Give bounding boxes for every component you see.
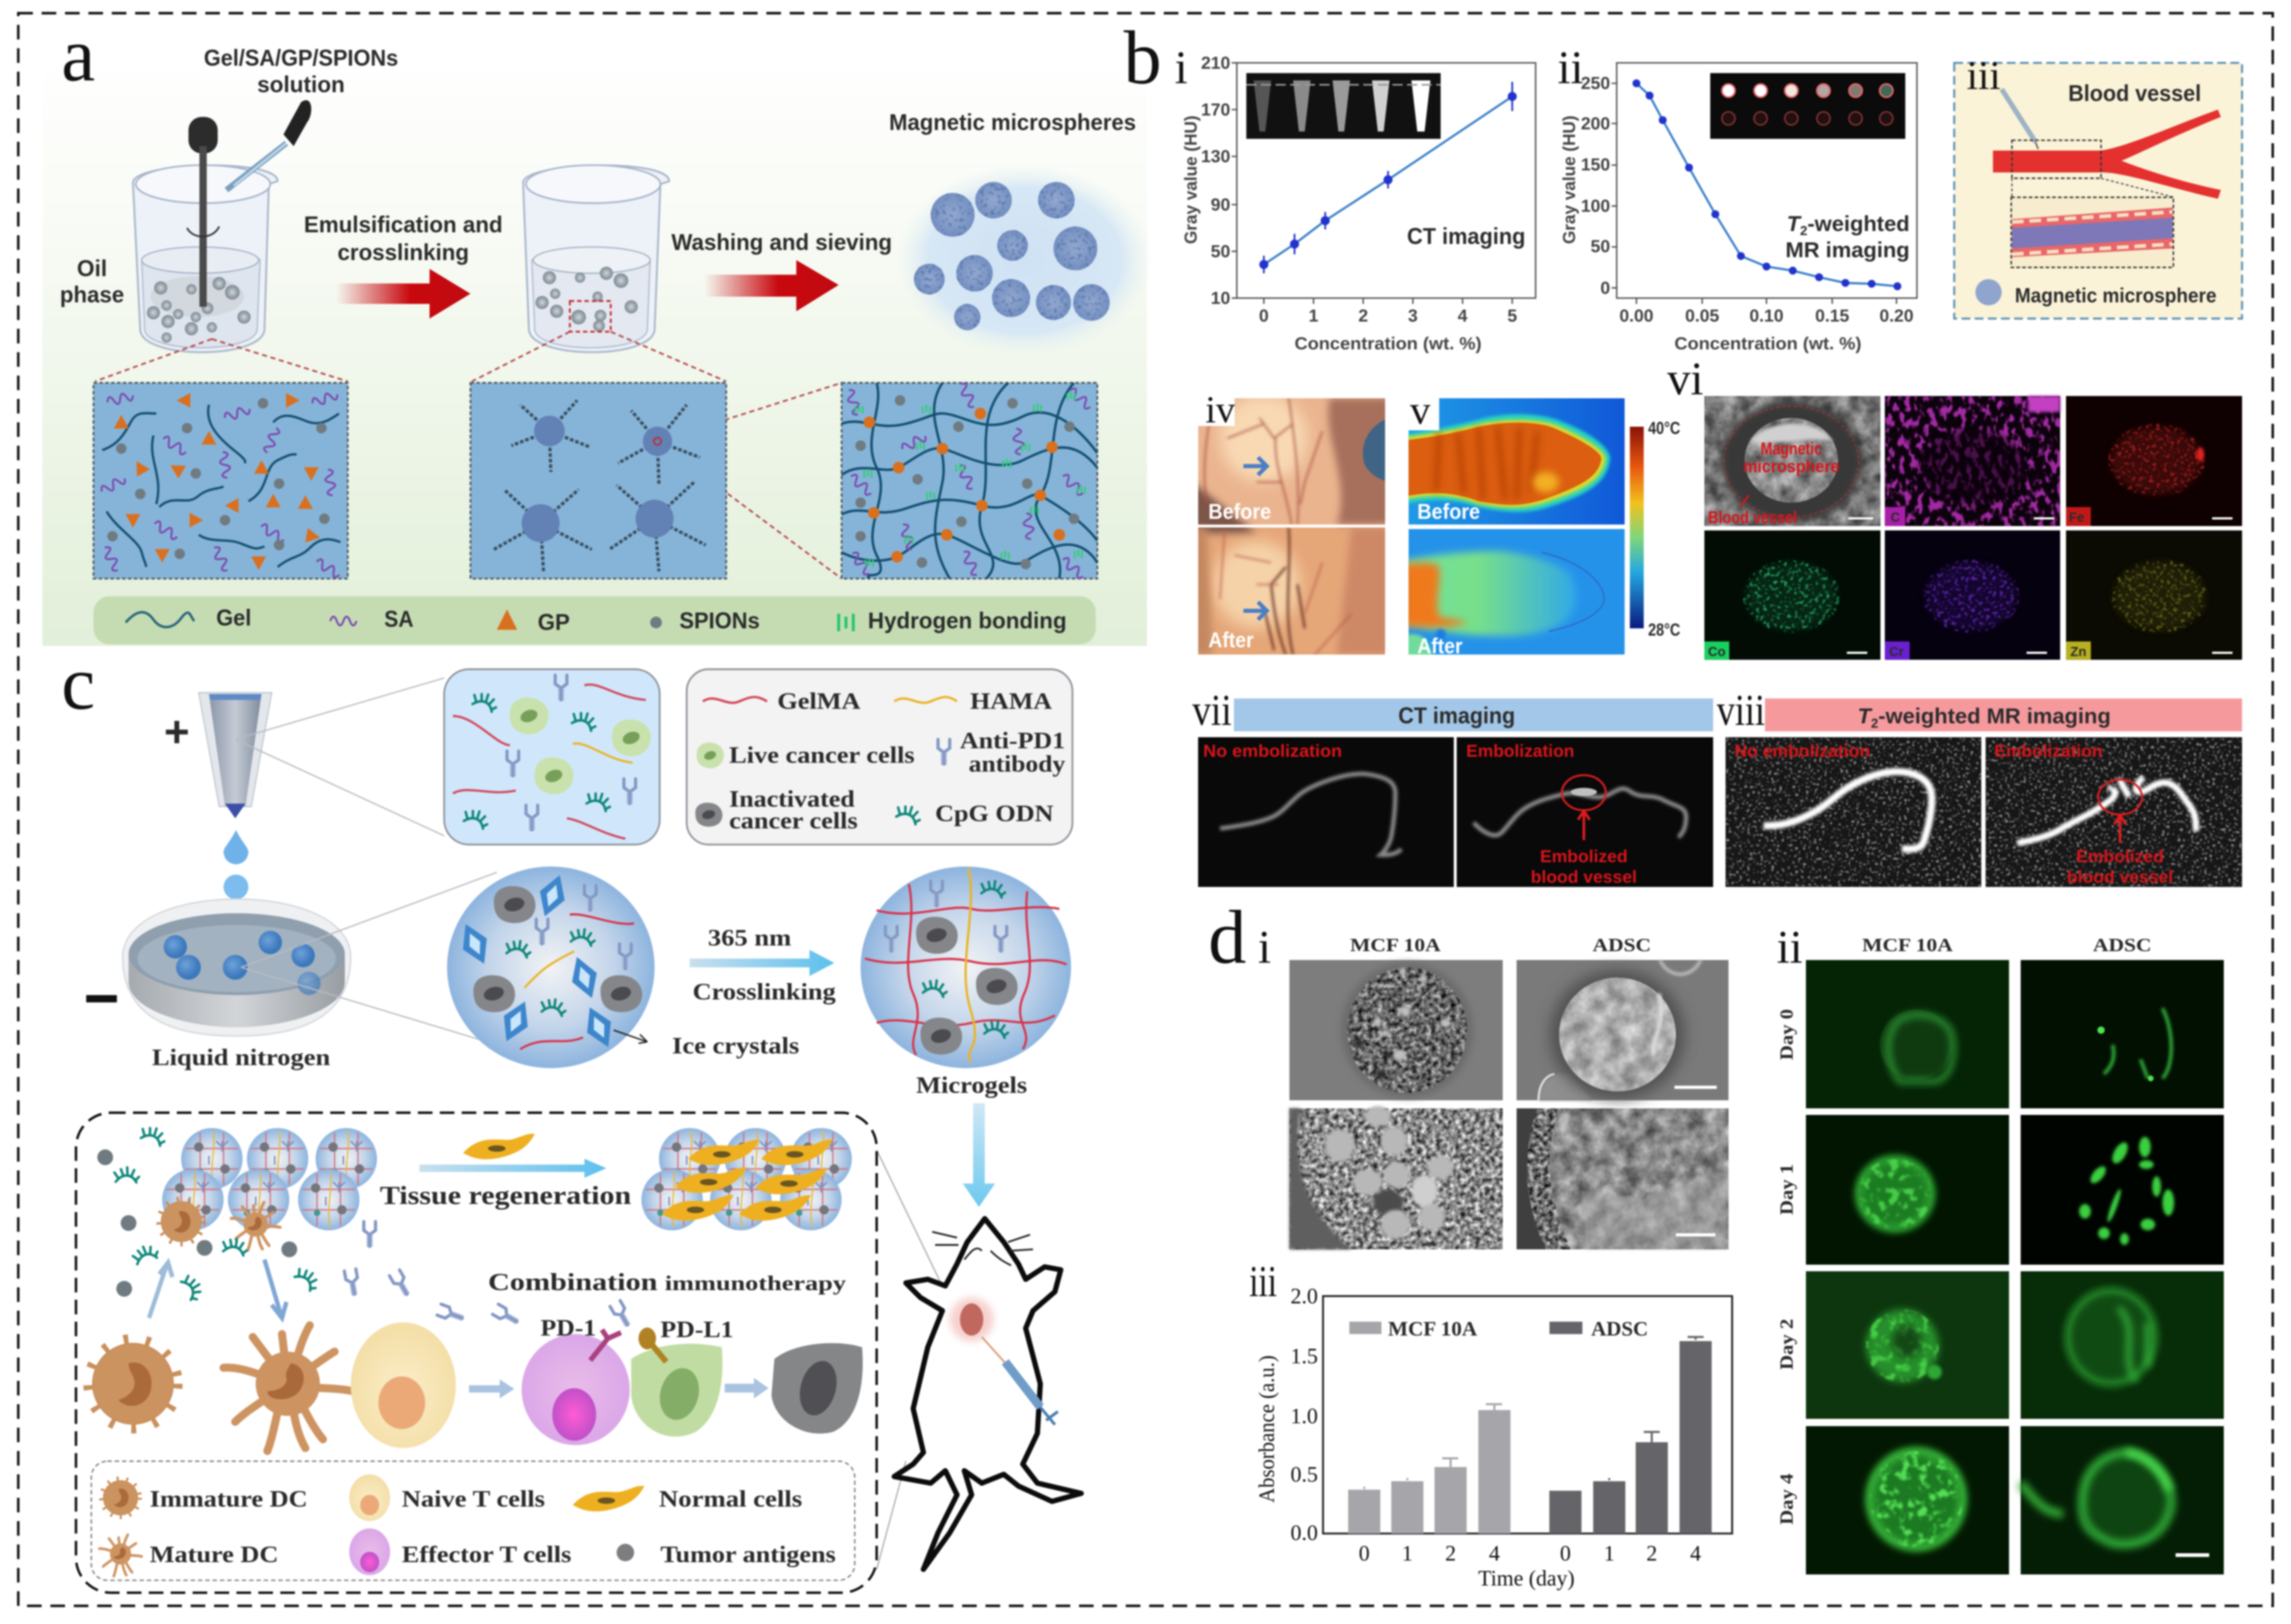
MR no embolization image bbox=[1726, 737, 1981, 887]
PD-1 receptor bbox=[541, 1315, 621, 1360]
chart: T2 MR gray value vs concentration: 150 bbox=[1581, 155, 1610, 174]
cell type legend: Immature DC bbox=[150, 1486, 307, 1512]
chart: T2 MR gray value vs concentration: 50 bbox=[1590, 237, 1610, 256]
CT embolization image: Embolized bbox=[1540, 846, 1628, 866]
mouse with injected tumour site bbox=[894, 1219, 1081, 1569]
oil phase label bbox=[60, 256, 124, 307]
materials legend: Live cancer cells bbox=[729, 742, 915, 768]
MR phantom inset bbox=[1710, 73, 1905, 139]
chart: CT gray value vs concentration: 4 bbox=[1458, 305, 1468, 325]
MR embolization image: Embolized bbox=[2076, 846, 2164, 866]
panel b iv: vessel photographs bbox=[1197, 396, 1386, 656]
panel d ii: fluorescence time course: ADSC bbox=[2093, 934, 2152, 956]
materials legend bbox=[687, 669, 1072, 845]
sub-label d i: i bbox=[1258, 922, 1271, 974]
chart: CT gray value vs concentration: 170 bbox=[1201, 100, 1230, 119]
sub-label d iii: iii bbox=[1249, 1257, 1277, 1306]
chromium map: Cr bbox=[1889, 644, 1904, 659]
fluorescence day 0 MCF 10A bbox=[1806, 960, 2009, 1108]
arrow: emulsification and crosslinking: crosslinking bbox=[338, 240, 469, 265]
box 3: hydrogel network bbox=[841, 382, 1098, 580]
electrospray nozzle with droplets: + bbox=[164, 707, 189, 756]
panel b vii: CT imaging: CT imaging bbox=[1399, 703, 1515, 728]
365 nm crosslinking arrow: Crosslinking bbox=[692, 980, 836, 1005]
chart: CT gray value vs concentration: CT imaging bbox=[1407, 224, 1525, 249]
chart: T2 MR gray value vs concentration: Gray value (HU) bbox=[1560, 116, 1579, 244]
iron map: Fe bbox=[2069, 510, 2084, 525]
SEM ADSC detail bbox=[1517, 1108, 1729, 1249]
chart: CT gray value vs concentration bbox=[1181, 53, 1536, 353]
CT embolization image bbox=[1457, 737, 1713, 887]
CT embolization image: Embolization bbox=[1466, 741, 1574, 761]
bar chart: absorbance over time: 0 bbox=[1359, 1541, 1370, 1566]
panel b v: thermal images: Before bbox=[1418, 500, 1480, 524]
CT no embolization image bbox=[1198, 737, 1453, 887]
CT tube inset bbox=[1246, 73, 1441, 139]
fluorescence day 2 MCF 10A bbox=[1806, 1271, 2009, 1419]
ice crystals callout: Ice crystals bbox=[672, 1033, 799, 1059]
microgels with normal cells bbox=[641, 1128, 852, 1230]
panel b v: thermal images: v bbox=[1410, 388, 1431, 433]
microgel cluster left bbox=[161, 1128, 377, 1250]
bar chart: absorbance over time: 1 bbox=[1402, 1541, 1413, 1566]
cobalt map: Co bbox=[1708, 644, 1726, 659]
sub-label i: i bbox=[1175, 42, 1188, 94]
liquid nitrogen dish bbox=[86, 899, 351, 1071]
chart: T2 MR gray value vs concentration: 250 bbox=[1581, 73, 1610, 93]
chart: CT gray value vs concentration: Concentration (wt. %) bbox=[1294, 333, 1481, 353]
zinc map: Zn bbox=[2070, 644, 2087, 659]
fluorescence day 0 ADSC bbox=[2021, 960, 2224, 1108]
panel b vii: CT imaging bbox=[1192, 686, 1713, 887]
chart: T2 MR gray value vs concentration: MR imaging bbox=[1785, 238, 1910, 262]
materials legend: antibody bbox=[969, 751, 1065, 777]
chart: CT gray value vs concentration: 50 bbox=[1211, 241, 1230, 261]
materials legend: Inactivated bbox=[729, 786, 855, 812]
effector T cell bbox=[521, 1334, 630, 1445]
DC pathway arrows bbox=[149, 1260, 287, 1318]
chart: T2 MR gray value vs concentration: 2 bbox=[1800, 224, 1808, 239]
chart: T2 MR gray value vs concentration: 0.20 bbox=[1880, 305, 1914, 325]
bar chart: absorbance over time bbox=[1255, 1284, 1732, 1591]
chart: T2 MR gray value vs concentration: 200 bbox=[1581, 114, 1610, 133]
panel b viii: MR imaging: -weighted MR imaging bbox=[1878, 704, 2110, 728]
tissue regeneration arrow and label: Tissue regeneration bbox=[380, 1182, 631, 1211]
cell type legend bbox=[92, 1461, 855, 1580]
cell type legend: Naive T cells bbox=[402, 1486, 545, 1512]
panel d ii: fluorescence time course: Day 1 bbox=[1776, 1164, 1797, 1215]
panel b iv: vessel photographs: After bbox=[1209, 629, 1253, 653]
chart: T2 MR gray value vs concentration: Concentration (wt. %) bbox=[1674, 333, 1861, 353]
bar chart legend bbox=[1349, 1318, 1648, 1341]
panel b vi: SEM and element maps bbox=[1705, 396, 2242, 660]
temperature colour bar: 28°C bbox=[1648, 620, 1680, 639]
sub-label vi: vi bbox=[1667, 353, 1703, 405]
panel b viii: MR imaging: viii bbox=[1717, 686, 1765, 735]
chart: T2 MR gray value vs concentration: 0.00 bbox=[1619, 305, 1654, 325]
panel b: imaging characterisation bbox=[1123, 16, 2242, 887]
bar chart: absorbance over time: Time (day) bbox=[1478, 1566, 1575, 1591]
naive T cell bbox=[351, 1322, 456, 1448]
arrow naive to effector bbox=[469, 1379, 514, 1399]
bar chart: absorbance over time: 2 bbox=[1445, 1541, 1456, 1566]
chart: CT gray value vs concentration: 5 bbox=[1507, 305, 1517, 325]
chart: T2 MR gray value vs concentration: T bbox=[1787, 212, 1802, 236]
panel d i: SEM micrographs bbox=[1289, 934, 1729, 1249]
MR embolization image: blood vessel bbox=[2067, 867, 2173, 886]
SEM image of embolised vessel: Blood vessel bbox=[1708, 507, 1797, 527]
cell type legend: Tumor antigens bbox=[660, 1542, 836, 1568]
MR no embolization image: No embolization bbox=[1734, 741, 1870, 761]
sub-label ii: ii bbox=[1558, 42, 1584, 94]
CT no embolization image: No embolization bbox=[1203, 741, 1342, 761]
box 1: precursor mixture bbox=[93, 383, 348, 579]
panel b iii: blood vessel schematic bbox=[1954, 53, 2242, 319]
released antigens and factors bbox=[97, 1123, 632, 1328]
panel b letter: b bbox=[1123, 16, 1161, 100]
sub-label d ii: ii bbox=[1777, 922, 1803, 974]
chart: CT gray value vs concentration: 0 bbox=[1259, 305, 1269, 325]
box 2: crosslinked spheres with chains bbox=[470, 383, 726, 579]
SEM MCF 10A detail bbox=[1289, 1106, 1503, 1249]
chromium map bbox=[1885, 530, 2060, 660]
arrow: emulsification and crosslinking bbox=[304, 212, 502, 319]
materials legend: Anti-PD1 bbox=[960, 728, 1065, 754]
fluorescence day 4 MCF 10A bbox=[1806, 1426, 2009, 1574]
chart: T2 MR gray value vs concentration bbox=[1560, 63, 1917, 353]
zinc map bbox=[2066, 530, 2242, 660]
zoom cone from droplet to frozen sphere bbox=[241, 872, 497, 1045]
chart: CT gray value vs concentration: 1 bbox=[1309, 305, 1318, 325]
bar chart: absorbance over time: 2 bbox=[1646, 1541, 1657, 1566]
bar chart: absorbance over time: 0 bbox=[1560, 1541, 1571, 1566]
guide lines to mouse bbox=[877, 1150, 957, 1569]
PD-1 receptor: PD-1 bbox=[541, 1315, 596, 1341]
chart: CT gray value vs concentration: Gray value (HU) bbox=[1181, 116, 1200, 244]
oil phase label: Oil bbox=[77, 256, 107, 282]
liquid nitrogen dish: Liquid nitrogen bbox=[152, 1045, 331, 1071]
panel a background bbox=[42, 52, 1147, 646]
tumour cell with PD-L1: PD-L1 bbox=[660, 1317, 733, 1342]
chart: T2 MR gray value vs concentration: -weighted bbox=[1808, 212, 1910, 236]
legend strip for panel a: Gel bbox=[216, 605, 251, 631]
panel d ii: fluorescence time course: Day 4 bbox=[1776, 1474, 1797, 1525]
panel c: cryogenic electrospray microgels bbox=[61, 642, 1081, 1592]
panel d letter: d bbox=[1209, 896, 1246, 980]
panel b v: thermal images bbox=[1407, 397, 1681, 656]
chart: CT gray value vs concentration: 2 bbox=[1358, 305, 1368, 325]
SEM MCF 10A overview bbox=[1289, 960, 1503, 1100]
magnetic microspheres cluster bbox=[889, 110, 1153, 357]
fluorescence day 1 ADSC bbox=[2021, 1115, 2224, 1265]
fluorescence day 2 ADSC bbox=[2021, 1271, 2224, 1419]
materials legend: CpG ODN bbox=[935, 801, 1053, 827]
legend strip for panel a bbox=[93, 596, 1096, 644]
materials legend: cancer cells bbox=[729, 809, 858, 834]
panel b iii: blood vessel schematic: Blood vessel bbox=[2068, 81, 2201, 106]
mature dendritic cell bbox=[223, 1325, 352, 1451]
carbon map bbox=[1885, 396, 2060, 526]
bar chart: absorbance over time: 0.0 bbox=[1291, 1520, 1318, 1545]
panel d ii: fluorescence time course: Day 0 bbox=[1776, 1009, 1797, 1060]
legend strip for panel a: Hydrogen bonding bbox=[868, 608, 1067, 633]
MR embolization image bbox=[1986, 737, 2242, 887]
panel b viii: MR imaging bbox=[1717, 686, 2242, 887]
arrow: washing and sieving bbox=[672, 230, 892, 311]
legend strip for panel a: SPIONs bbox=[679, 608, 760, 633]
legend strip for panel a: SA bbox=[384, 607, 413, 632]
dashed therapy box bbox=[76, 1113, 877, 1592]
panel c letter: c bbox=[61, 642, 95, 726]
bar chart: absorbance over time: Absorbance (a.u.) bbox=[1255, 1355, 1279, 1503]
chart: CT gray value vs concentration: 130 bbox=[1201, 146, 1230, 166]
MR embolization image: Embolization bbox=[1994, 741, 2102, 761]
materials legend: HAMA bbox=[970, 689, 1052, 714]
chart: CT gray value vs concentration: 10 bbox=[1211, 288, 1230, 308]
365 nm crosslinking arrow bbox=[690, 925, 836, 1005]
cobalt map bbox=[1705, 530, 1880, 660]
panel b viii: MR imaging: 2 bbox=[1871, 716, 1878, 731]
chart: T2 MR gray value vs concentration: 0.10 bbox=[1749, 305, 1784, 325]
microgels label: Microgels bbox=[916, 1073, 1027, 1099]
ice crystals callout bbox=[613, 1030, 799, 1059]
panel d i: SEM micrographs: MCF 10A bbox=[1350, 934, 1441, 956]
solution label bbox=[204, 45, 398, 97]
zoom cone from nozzle to solution bbox=[235, 678, 444, 836]
beaker two bbox=[523, 165, 669, 352]
arrow: washing and sieving: Washing and sieving bbox=[672, 230, 892, 255]
zoom guide lines bbox=[95, 332, 841, 579]
fluorescence day 1 MCF 10A bbox=[1806, 1115, 2009, 1265]
arrow tumour cell to dead bbox=[725, 1378, 769, 1399]
carbon map: C bbox=[1891, 510, 1900, 525]
frozen droplet with ice crystals bbox=[447, 867, 654, 1068]
panel b iii: blood vessel schematic: iii bbox=[1967, 53, 2001, 98]
bar chart legend: MCF 10A bbox=[1388, 1318, 1477, 1341]
immature dendritic cell bbox=[92, 1343, 174, 1425]
bar chart: absorbance over time: 4 bbox=[1489, 1541, 1500, 1566]
tissue regeneration arrow and label bbox=[380, 1134, 631, 1211]
cell type legend: Normal cells bbox=[659, 1486, 802, 1512]
iron map bbox=[2066, 396, 2242, 526]
panel b iv: vessel photographs: Before bbox=[1209, 500, 1271, 524]
inactivated tumour cell bbox=[771, 1343, 863, 1433]
solution label: Gel/SA/GP/SPIONs bbox=[204, 45, 398, 71]
tumour cell with PD-L1 bbox=[631, 1317, 733, 1437]
temperature colour bar bbox=[1630, 418, 1680, 639]
legend strip for panel a: GP bbox=[538, 610, 570, 635]
SEM image of embolised vessel: Magnetic bbox=[1761, 439, 1822, 458]
materials legend: GelMA bbox=[778, 689, 861, 714]
oil phase label: phase bbox=[60, 282, 124, 307]
chart: T2 MR gray value vs concentration: 0.15 bbox=[1815, 305, 1849, 325]
panel a letter: a bbox=[61, 13, 95, 97]
bar chart: absorbance over time: 2.0 bbox=[1291, 1284, 1318, 1308]
fluorescence day 4 ADSC bbox=[2021, 1426, 2224, 1574]
chart: CT gray value vs concentration: 210 bbox=[1201, 53, 1230, 73]
chart: T2 MR gray value vs concentration: 0 bbox=[1601, 278, 1610, 297]
panel a: synthesis of magnetic microspheres bbox=[42, 13, 1153, 646]
electrospray nozzle with droplets bbox=[164, 692, 272, 899]
panel b v: thermal images: After bbox=[1418, 634, 1462, 658]
panel b iv: vessel photographs: iv bbox=[1205, 389, 1236, 431]
panel d ii: fluorescence time course bbox=[1776, 934, 2224, 1574]
microgel after crosslinking bbox=[861, 867, 1071, 1068]
bar chart: absorbance over time: 4 bbox=[1690, 1541, 1701, 1566]
panel b viii: MR imaging: T bbox=[1857, 704, 1873, 728]
panel b vii: CT imaging: vii bbox=[1192, 686, 1232, 735]
bar chart: absorbance over time: 1 bbox=[1604, 1541, 1614, 1566]
cell type legend: Effector T cells bbox=[402, 1542, 571, 1568]
chart: CT gray value vs concentration: 90 bbox=[1211, 194, 1230, 214]
SEM ADSC overview bbox=[1517, 960, 1729, 1100]
chart: CT gray value vs concentration: 3 bbox=[1408, 305, 1418, 325]
365 nm crosslinking arrow: 365 nm bbox=[708, 925, 791, 951]
panel d i: SEM micrographs: ADSC bbox=[1592, 934, 1651, 956]
chart: T2 MR gray value vs concentration: 100 bbox=[1581, 196, 1610, 216]
bar chart legend: ADSC bbox=[1591, 1318, 1648, 1341]
cell type legend: Mature DC bbox=[150, 1542, 278, 1568]
bar chart: absorbance over time: 0.5 bbox=[1291, 1462, 1318, 1486]
solution label: solution bbox=[257, 72, 345, 97]
solution inset bbox=[444, 669, 660, 845]
panel d: cell culture results bbox=[1209, 896, 2224, 1591]
bar chart: absorbance over time: 1.0 bbox=[1291, 1404, 1318, 1428]
combination immunotherapy heading: Combination immunotherapy bbox=[488, 1268, 846, 1296]
magnetic microspheres cluster: Magnetic microspheres bbox=[889, 110, 1136, 135]
arrow: emulsification and crosslinking: Emulsification and bbox=[304, 212, 502, 237]
bar chart: absorbance over time: 1.5 bbox=[1291, 1344, 1318, 1368]
panel d ii: fluorescence time course: Day 2 bbox=[1776, 1319, 1797, 1370]
panel b iii: blood vessel schematic: Magnetic microsphere bbox=[2015, 284, 2217, 307]
beaker one with stirrer and dropper bbox=[133, 100, 311, 352]
panel d ii: fluorescence time course: MCF 10A bbox=[1862, 934, 1953, 956]
SEM image of embolised vessel bbox=[1705, 396, 1880, 527]
CT embolization image: blood vessel bbox=[1530, 867, 1637, 886]
SEM image of embolised vessel: microsphere bbox=[1743, 456, 1840, 476]
downward delivery arrow bbox=[963, 1103, 995, 1207]
temperature colour bar: 40°C bbox=[1648, 418, 1680, 438]
chart: T2 MR gray value vs concentration: 0.05 bbox=[1685, 305, 1719, 325]
